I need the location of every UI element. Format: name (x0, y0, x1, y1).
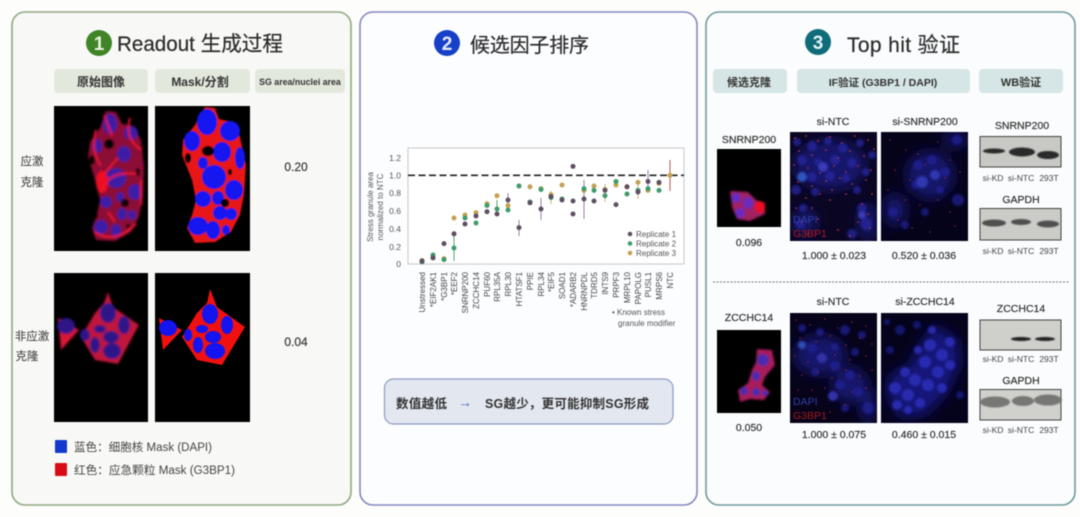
candidate clone SNRNP200: SNRNP200 (722, 134, 776, 146)
micrograph: non-stressed raw (54, 273, 148, 422)
x axis gene labels: PRPF3 (612, 271, 621, 298)
western blot GAPDH bottom: GAPDH (1002, 375, 1040, 387)
y axis tick labels (389, 153, 401, 269)
y axis tick labels: 0.4 (389, 224, 401, 234)
x axis gene labels (418, 271, 675, 313)
reference line at NTC = 1.0 (408, 174, 684, 176)
replicate 2 points (420, 179, 662, 264)
candidate clone ZCCHC14 (717, 312, 781, 434)
IF image si-NTC: DAPI (793, 214, 818, 226)
x axis gene labels: MRPS6 (655, 271, 664, 300)
IF image si-NTC lower: G3BP1 (793, 410, 827, 422)
y axis tick labels: 1.2 (389, 153, 401, 163)
row label: non-stressed clone (15, 329, 50, 363)
value: non-stressed ratio: 0.04 (284, 335, 308, 349)
IF image si-NTC: G3BP1 (793, 228, 827, 240)
column header: candidate clone (713, 69, 787, 93)
footnote: known modifier (612, 308, 676, 328)
row label: stressed clone: 应激 (20, 154, 44, 168)
micrograph: non-stressed mask (155, 273, 250, 422)
row label: stressed clone (20, 154, 44, 189)
chart: stress granule area by gene (366, 148, 684, 328)
column header: raw image (54, 69, 148, 93)
x axis gene labels: INTS9 (601, 271, 610, 295)
column header: IF validation: IF验证 (G3BP1 / DAPI) (829, 76, 937, 89)
column header: SG area ratio (255, 69, 345, 93)
y axis tick labels: 0.6 (389, 206, 401, 216)
heading: top hit: 3 (813, 33, 823, 54)
column header: mask (155, 69, 250, 93)
callout: interpretation: SG越少，更可能抑制SG形成 (485, 396, 649, 411)
heading: top hit: Top hit 验证 (847, 34, 960, 57)
chart legend: replicates: Replicate 1 (636, 230, 677, 239)
x axis gene labels: SOAD1 (558, 271, 567, 299)
column header: candidate clone: 候选克隆 (727, 75, 771, 89)
IF image si-SNRNP200: si-SNRNP200 (892, 116, 958, 128)
IF image si-NTC: 1.000 ± 0.023 (802, 250, 866, 262)
callout: interpretation (384, 379, 673, 424)
IF image si-SNRNP200: 0.520 ± 0.036 (892, 250, 956, 262)
western blot GAPDH top: si-NTC (1008, 246, 1034, 256)
row label: non-stressed clone: 非应激 (15, 329, 50, 343)
panel: top hit validation (706, 12, 1075, 505)
heading: candidate ranking: 候选因子排序 (470, 34, 589, 57)
y axis tick labels: 0.2 (389, 242, 401, 252)
candidate clone ZCCHC14: 0.050 (736, 422, 762, 434)
x axis gene labels: RPL34 (537, 271, 546, 296)
western blot ZCCHC14: 293T (1039, 354, 1059, 364)
chart legend: replicates: Replicate 3 (636, 249, 677, 258)
column header: WB validation: WB验证 (1001, 75, 1041, 89)
footnote: known modifier: • Known stress (612, 308, 665, 317)
heading: Readout: 1 (94, 34, 105, 55)
western blot GAPDH bottom: si-NTC (1008, 425, 1034, 435)
IF image si-NTC lower: 1.000 ± 0.075 (802, 429, 866, 441)
replicate 1 points (420, 164, 662, 264)
western blot ZCCHC14 (980, 303, 1061, 364)
y axis tick labels: 0 (396, 259, 401, 269)
western blot ZCCHC14: ZCCHC14 (997, 303, 1045, 315)
x axis gene labels: SNRNP200 (461, 271, 470, 313)
western blot SNRNP200 (980, 120, 1061, 183)
western blot GAPDH bottom (980, 375, 1062, 435)
x axis gene labels: HNRNPDL (580, 271, 589, 311)
panel: candidate factor ranking (360, 12, 697, 505)
candidate clone SNRNP200 (717, 134, 781, 249)
y axis title: normalized to NTC (376, 173, 385, 240)
western blot ZCCHC14: si-NTC (1008, 354, 1034, 364)
IF image si-NTC (790, 116, 878, 262)
x axis gene labels: Unstressed (418, 272, 427, 312)
heading: top hit (805, 29, 960, 57)
western blot ZCCHC14: si-KD (983, 354, 1003, 364)
heading: Readout: Readout 生成过程 (117, 33, 283, 56)
column header: WB validation (979, 69, 1063, 93)
western blot GAPDH top: si-KD (983, 246, 1003, 256)
western blot GAPDH bottom: 293T (1039, 425, 1059, 435)
micrograph: stressed mask (155, 106, 250, 251)
row: SNRNP200 (717, 116, 1061, 262)
x axis gene labels: HTATSF1 (515, 271, 524, 306)
x axis gene labels: *G3BP1 (440, 271, 449, 301)
replicate 3 points (420, 173, 672, 263)
arrow: → (458, 394, 472, 410)
western blot GAPDH bottom: si-KD (983, 425, 1003, 435)
row label: non-stressed clone: 克隆 (16, 349, 39, 363)
chart legend: replicates: Replicate 2 (636, 240, 677, 248)
IF image si-ZCCHC14: 0.460 ± 0.015 (892, 429, 956, 441)
x axis gene labels: *ADARB2 (569, 271, 578, 307)
heading: candidate ranking (434, 30, 589, 57)
western blot SNRNP200: si-KD (983, 173, 1003, 183)
western blot SNRNP200: 293T (1039, 173, 1059, 183)
callout: interpretation: 数值越低 (396, 396, 447, 411)
x axis gene labels: *EIF5 (547, 271, 556, 292)
value: stressed ratio: 0.20 (284, 160, 308, 174)
IF image si-NTC: si-NTC (817, 116, 850, 128)
western blot GAPDH top: 293T (1039, 246, 1059, 256)
IF image si-ZCCHC14 (881, 296, 968, 441)
row label: stressed clone: 克隆 (20, 175, 44, 189)
western blot GAPDH top (980, 194, 1061, 256)
x axis gene labels: RPL30 (504, 271, 513, 296)
x axis gene labels: PUSL1 (644, 271, 653, 297)
IF image si-NTC lower: DAPI (793, 396, 818, 408)
x axis gene labels: NTC (666, 272, 675, 288)
x axis gene labels: PPIE (526, 272, 535, 290)
heading: candidate ranking: 2 (442, 34, 452, 55)
x axis gene labels: TDRD5 (590, 271, 599, 299)
x axis gene labels: PUF60 (483, 271, 492, 297)
panel: readout generation (12, 12, 351, 505)
x axis gene labels: PAPOLG (634, 272, 643, 304)
candidate clone SNRNP200: 0.096 (736, 237, 762, 249)
column header: raw image: 原始图像 (77, 74, 125, 89)
row: ZCCHC14 (717, 296, 1062, 441)
y axis tick labels: 0.8 (389, 188, 401, 198)
y axis title: Stress granule area (366, 172, 375, 242)
IF image si-SNRNP200 (881, 116, 968, 262)
legend: red stress granule mask: 红色：应急颗粒 Mask (G3BP1) (74, 463, 235, 477)
x axis gene labels: *EEF2 (450, 271, 459, 295)
western blot GAPDH top: GAPDH (1002, 194, 1040, 206)
column header: IF validation (797, 69, 970, 93)
micrograph: stressed raw (54, 106, 148, 251)
IF image si-NTC lower: si-NTC (817, 296, 850, 308)
x axis gene labels: ZCCHC14 (472, 271, 481, 309)
candidate clone ZCCHC14: ZCCHC14 (725, 312, 773, 324)
IF image si-ZCCHC14: si-ZCCHC14 (895, 296, 955, 308)
western blot SNRNP200: si-NTC (1008, 173, 1034, 183)
x axis gene labels: RPL35A (493, 271, 502, 302)
y axis tick labels: 1.0 (389, 170, 401, 180)
x axis gene labels: MRPL10 (623, 271, 632, 303)
x axis gene labels: *EIF2AK1 (429, 271, 438, 307)
error bars (454, 160, 670, 261)
western blot SNRNP200: SNRNP200 (995, 120, 1049, 132)
legend: blue nuclei mask: 蓝色：细胞核 Mask (DAPI) (74, 440, 212, 454)
y axis title (366, 172, 385, 242)
column header: mask: Mask/分割 (171, 74, 229, 89)
chart legend: replicates (628, 230, 677, 258)
column header: SG area ratio: SG area/nuclei area (259, 77, 341, 87)
footnote: known modifier: granule modifier (618, 319, 676, 328)
IF image si-NTC lower (790, 296, 877, 441)
